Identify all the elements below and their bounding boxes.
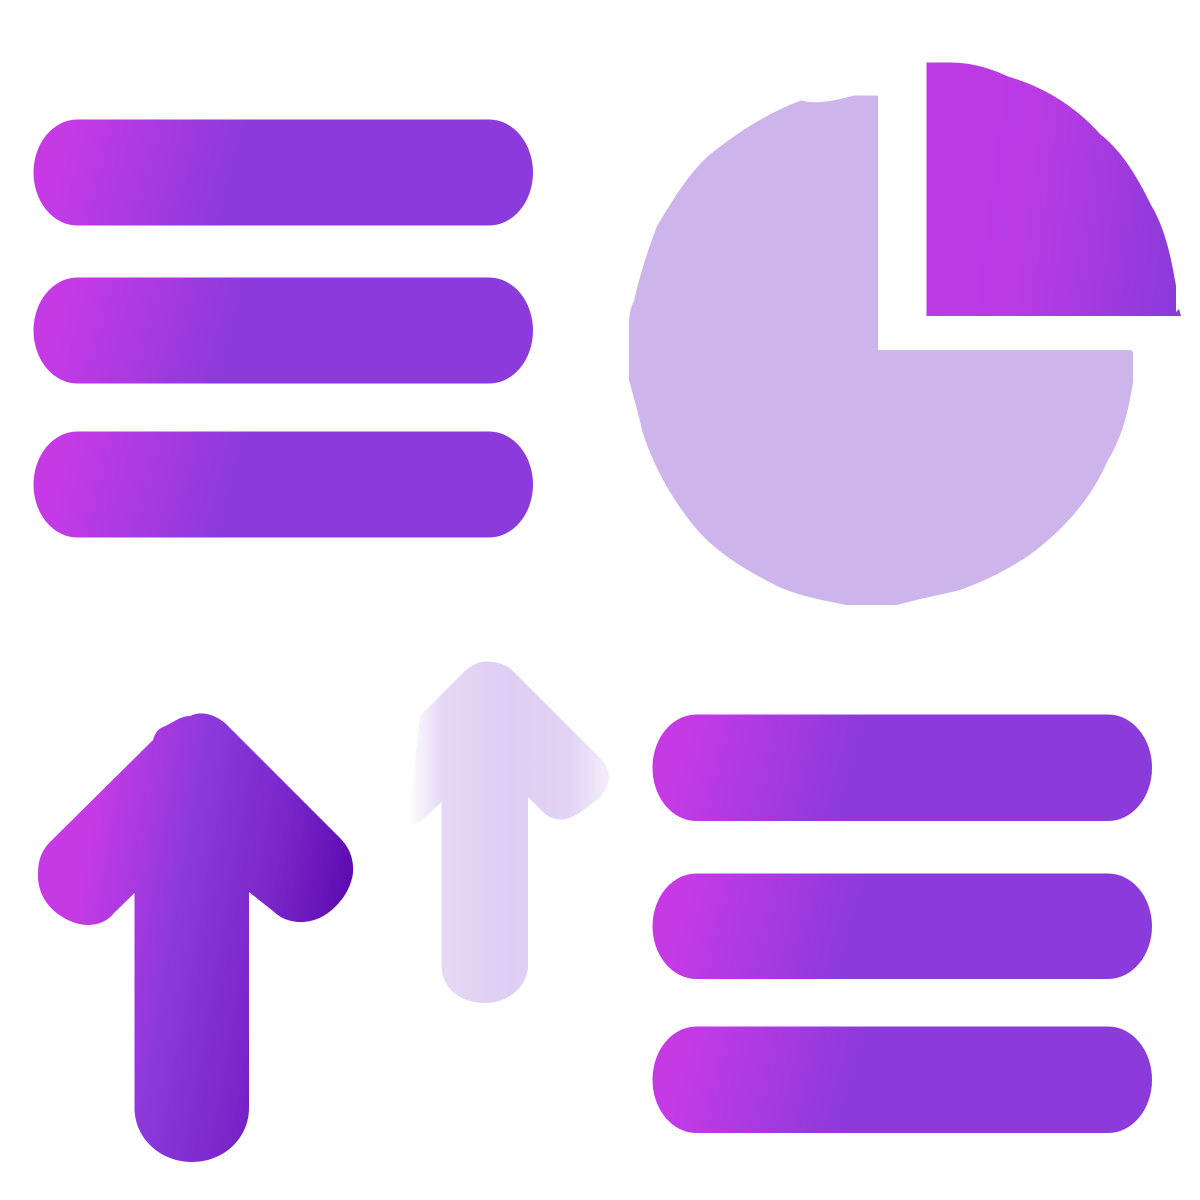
bar 5	[652, 874, 1152, 979]
pie main segment	[629, 96, 1133, 605]
bar 3	[34, 432, 533, 538]
large up arrow	[38, 713, 353, 1162]
bar 1	[34, 120, 533, 226]
bar 4	[652, 714, 1152, 821]
bar 6	[652, 1026, 1152, 1133]
bottom right bars	[652, 714, 1152, 1133]
small faded up arrow	[408, 661, 609, 1003]
pie chart	[629, 62, 1181, 605]
top left bars	[34, 120, 533, 538]
bar 2	[34, 278, 533, 384]
pie highlighted slice	[926, 62, 1181, 316]
